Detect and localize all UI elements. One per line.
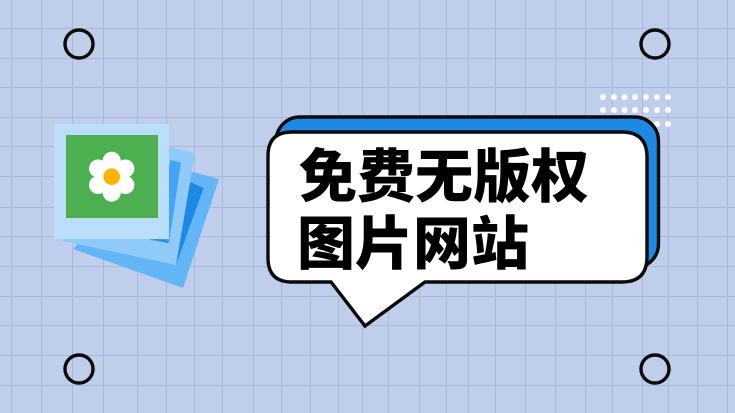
corner ring: bottom right <box>641 355 669 383</box>
back photo <box>73 172 219 288</box>
front photo <box>54 124 169 239</box>
corner ring: bottom left <box>65 355 93 383</box>
green picture <box>66 135 158 218</box>
icon: flower <box>89 152 134 202</box>
title line 2: 图片网站 <box>297 212 529 277</box>
bubble front with tail <box>268 132 647 326</box>
corner ring: top left <box>65 30 93 58</box>
dot pattern <box>600 94 671 127</box>
bubble back layer <box>276 117 658 268</box>
middle photo <box>62 147 195 265</box>
corner ring: top right <box>641 30 669 58</box>
title line 1: 免费无版权 <box>299 145 589 210</box>
icon: photo stack <box>54 124 219 288</box>
speech bubble <box>268 117 658 326</box>
